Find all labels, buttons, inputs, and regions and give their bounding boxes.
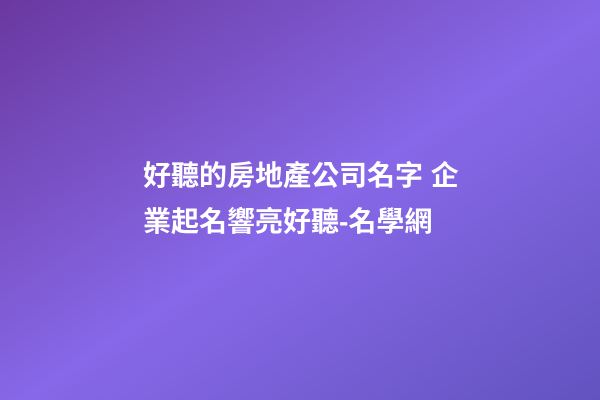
- title: [143, 160, 459, 237]
- title: 業起名響亮好聽-名學網: [143, 206, 432, 237]
- title: 好聽的房地產公司名字 企: [143, 160, 459, 191]
